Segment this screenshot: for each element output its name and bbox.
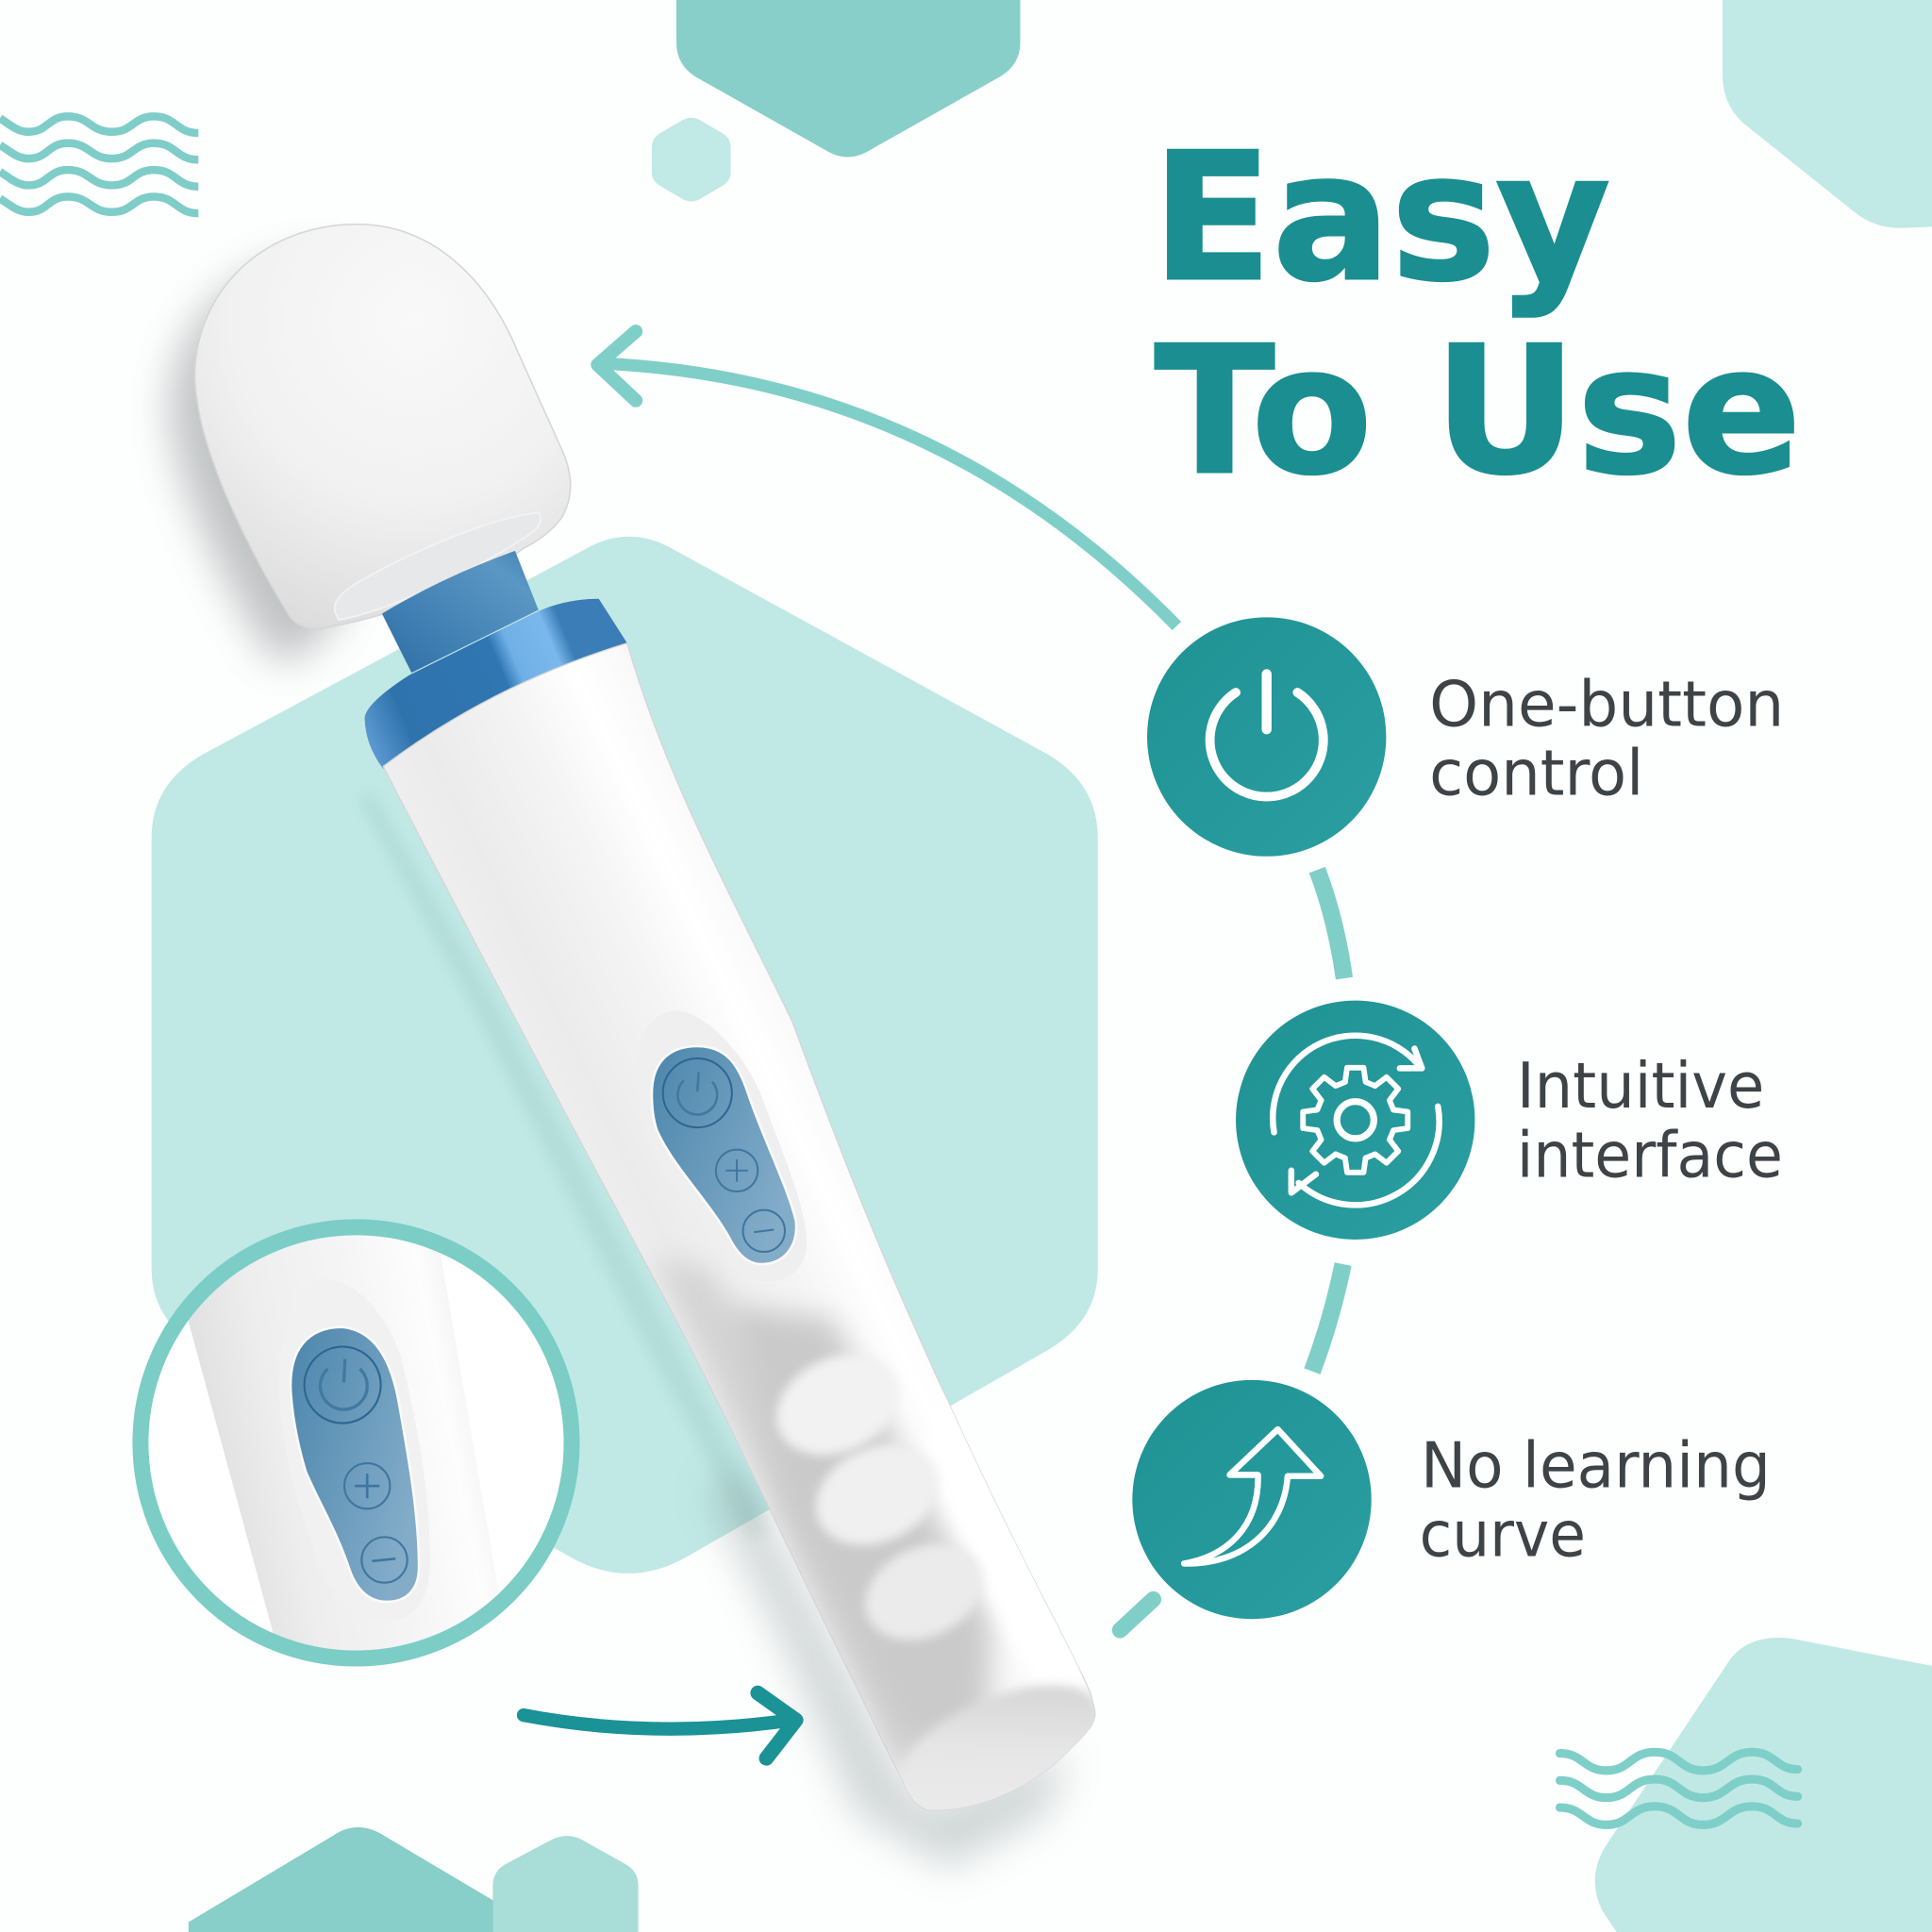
label: one-button control: One-button [1429,667,1784,741]
connector dash 2 [1312,1264,1343,1372]
label: intuitive interface: Intuitive [1517,1049,1764,1123]
background hexagon: large centre [152,537,1098,1574]
label: no learning curve: No learning [1421,1428,1771,1502]
inset blue panel [291,1327,419,1602]
label: intuitive interface: interface [1517,1118,1783,1191]
inset minus button [361,1537,408,1583]
inset: zoomed control panel [141,1208,572,1688]
background hexagon: bottom right [1595,1638,1932,1932]
wand product [170,225,1121,1867]
label: one-button control [1429,667,1784,809]
label: no learning curve: curve [1420,1498,1586,1572]
feature: intuitive interface [1236,1001,1783,1240]
label: no learning curve [1420,1428,1771,1572]
arrow to wand base [524,1693,796,1758]
head inner rim [335,512,541,620]
icon: rising arrow [1132,1380,1372,1619]
background hexagon: bottom left dark [189,1827,530,1932]
minus button [743,1210,785,1252]
inset ring [141,1227,572,1658]
wand neck [382,551,539,673]
body shadow on hexagon [359,789,770,1541]
label: one-button control: control [1429,736,1643,809]
wand head [194,225,571,628]
background hexagon: small top [652,118,731,202]
inset plus button [344,1463,390,1508]
body shadow on background [708,1466,1068,1867]
icon: power [1147,617,1386,857]
feature: no learning curve [1132,1380,1771,1619]
label: intuitive interface [1517,1049,1783,1191]
title: Easy [1152,116,1610,321]
power button [663,1058,732,1127]
waves: top left [0,116,198,213]
background hexagon: bottom left light [492,1836,639,1932]
waves: bottom right [1560,1752,1798,1824]
wand body [383,643,1121,1841]
head shadow [170,257,345,660]
connector dash 1 [1317,870,1344,978]
inset power button [305,1347,381,1424]
wand collar [365,599,627,769]
large curved arrow to wand head [597,331,1176,626]
grip area [658,1258,1094,1810]
background hexagon: top right [1723,0,1932,228]
inset panel well [400,1357,424,1475]
connector dash 3 [1120,1599,1154,1630]
icon: gear with rotating arrows [1236,1001,1474,1240]
plus button [716,1150,758,1191]
control panel [637,1010,807,1281]
feature: one-button control [1147,617,1784,857]
title: To Use [1155,309,1802,514]
inset wand section [189,1236,466,1651]
background hexagon: top centre [676,0,1020,158]
title [1152,116,1802,514]
